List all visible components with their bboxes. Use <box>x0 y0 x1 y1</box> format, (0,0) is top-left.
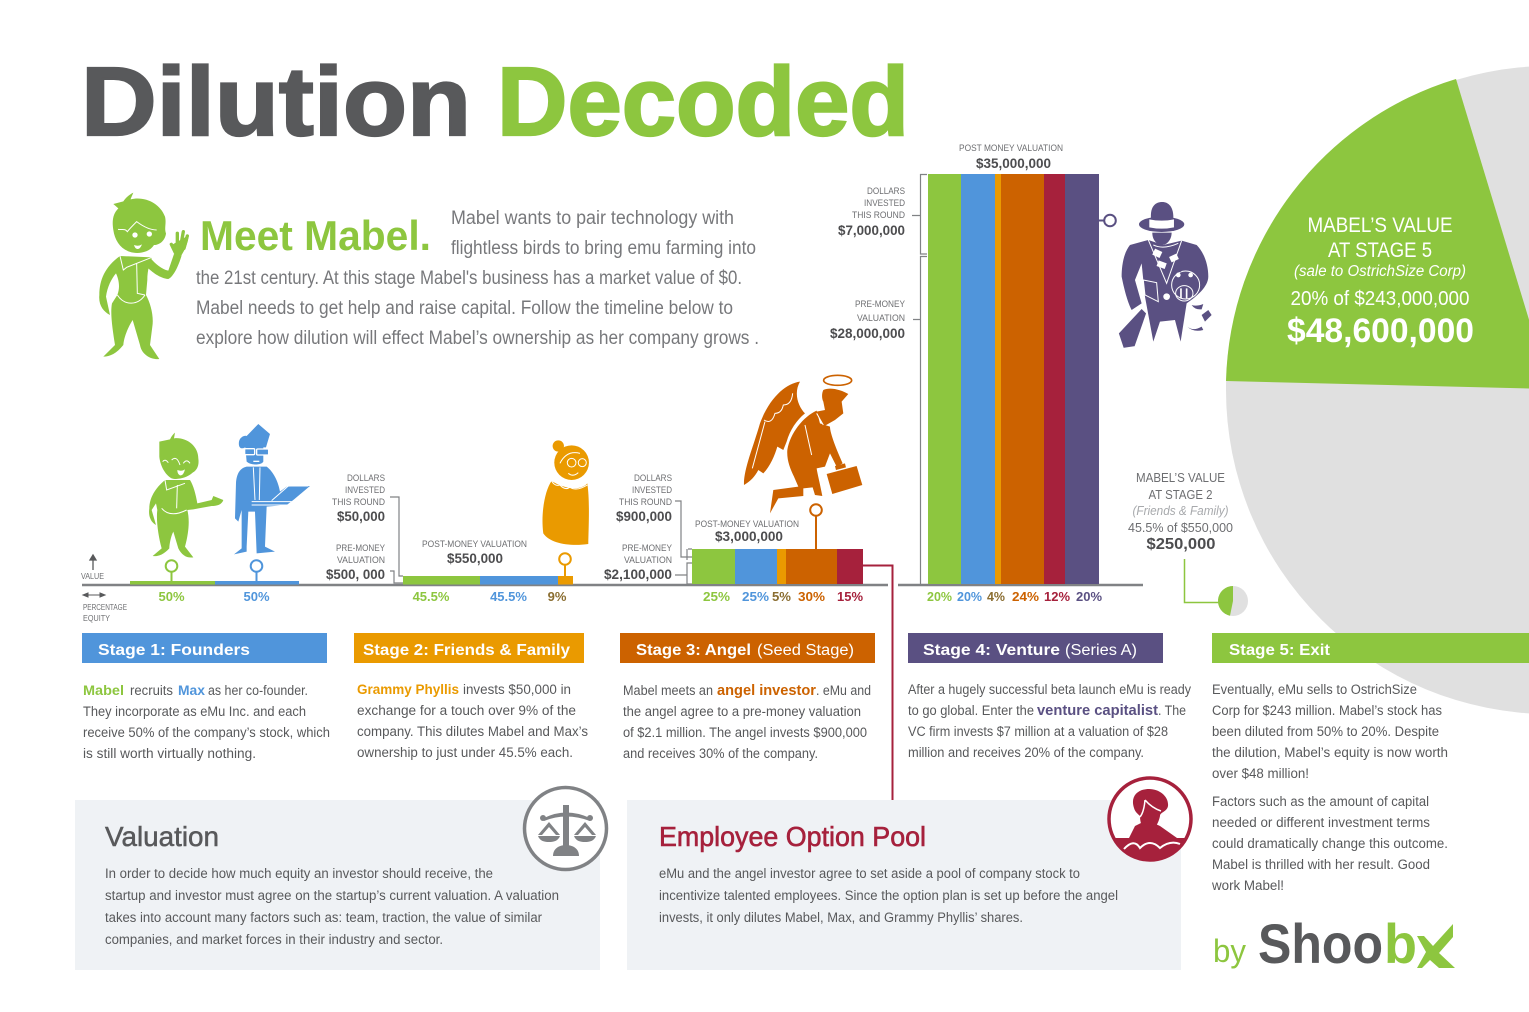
stage 3 labels: $2,100,000 <box>604 567 672 582</box>
stage 1 panel <box>82 633 330 761</box>
stage 3 percentages <box>703 589 863 604</box>
stage 3 percentages: 25% <box>742 589 769 604</box>
callout: Mabel's value at stage 2 <box>1128 470 1233 553</box>
panel: valuation: companies, and market forces in their industry and sector. <box>105 932 443 947</box>
intro text: flightless birds to bring emu farming into <box>451 238 756 259</box>
callout: Mabel's value at stage 5: $48,600,000 <box>1287 312 1474 350</box>
stage 4 post-money label: $35,000,000 <box>976 156 1051 171</box>
stage 2 panel <box>354 633 588 760</box>
title: Decoded <box>497 47 909 156</box>
stage 3 percentages: 30% <box>798 589 825 604</box>
icon: employee <box>1109 778 1191 860</box>
stage 4 labels: VALUATION <box>857 313 905 324</box>
option pool connector <box>863 566 892 800</box>
stage 4 labels: THIS ROUND <box>852 210 905 221</box>
stage 3 post-money label: $3,000,000 <box>715 529 783 544</box>
stage 4 post-money label <box>959 143 1063 171</box>
title: Dilution <box>81 47 471 156</box>
callout: Mabel's value at stage 5 <box>1287 214 1474 350</box>
stage 2 panel: exchange for a touch over 9% of the <box>357 703 576 718</box>
stage 2 percentages: 9% <box>548 589 567 604</box>
stage 2 labels: $500, 000 <box>326 567 385 582</box>
stage 2 post-money label: $550,000 <box>447 551 503 566</box>
stage 4 labels: PRE-MONEY <box>855 299 906 310</box>
stage 4 panel: Stage 4: Venture <box>923 642 1060 659</box>
stage 3 panel: angel investor <box>717 682 816 699</box>
stage 1 panel: Stage 1: Founders <box>98 642 250 659</box>
logo: by Shoobx: Shoo <box>1258 912 1383 975</box>
stage 4 panel: venture capitalist <box>1037 703 1158 719</box>
stage 1 panel: receive 50% of the company’s stock, which <box>83 725 330 740</box>
stage 2 panel: Stage 2: Friends & Family <box>363 642 570 659</box>
stage 4 bar <box>928 174 1116 584</box>
stage 3 labels: PRE-MONEY <box>622 543 673 554</box>
panel: employee option pool: incentivize talented employees. Since the option plan is set up before the angel <box>659 888 1118 903</box>
stage 4 panel: (Series A) <box>1065 642 1137 659</box>
stage 2 brackets <box>390 497 403 583</box>
panel: employee option pool <box>627 800 1181 970</box>
stage 4 labels: INVESTED <box>864 198 905 209</box>
stage 3 brackets <box>675 501 692 584</box>
stage 2 labels: VALUATION <box>337 555 385 566</box>
stage 4 panel: VC firm invests $7 million at a valuation of $28 <box>908 724 1168 739</box>
logo: by Shoobx: b <box>1384 912 1417 975</box>
stage 3 panel: Mabel meets an <box>623 683 713 698</box>
stage 4 panel: to go global. Enter the <box>908 703 1034 718</box>
stage 1 bar <box>130 560 299 584</box>
panel: employee option pool: Employee Option Pool <box>659 821 926 852</box>
stage 3 labels: $900,000 <box>616 509 672 524</box>
stage 2 percentages: 45.5% <box>413 589 450 604</box>
panel: valuation: startup and investor must agree on the startup’s current valuation. A valuation <box>105 888 559 903</box>
icon: Grammy Phyllis <box>542 440 589 545</box>
stage 1 percentages: 50% <box>158 589 185 604</box>
stage 3 percentages: 15% <box>837 589 863 604</box>
stage 4 percentages: 4% <box>987 589 1005 604</box>
stage 1 panel: is still worth virtually nothing. <box>83 746 256 761</box>
stage 2 labels <box>326 473 386 582</box>
stage 3 labels: DOLLARS <box>634 473 672 484</box>
stage 5 panel: Stage 5: Exit <box>1229 642 1330 659</box>
stage 4 panel: million and receives 20% of the company. <box>908 745 1144 760</box>
stage 1 percentages: 50% <box>243 589 270 604</box>
stage 3 panel: and receives 30% of the company. <box>623 746 818 761</box>
stage 5 panel: needed or different investment terms <box>1212 815 1430 830</box>
panel: valuation: Valuation <box>105 821 219 852</box>
legend: value and percentage equity: VALUE <box>81 571 104 581</box>
stage 4 percentages: 12% <box>1044 589 1070 604</box>
intro text: Mabel wants to pair technology with <box>451 208 734 229</box>
stage 4 percentages: 20% <box>927 589 952 604</box>
callout: Mabel's value at stage 5: 20% of $243,000,000 <box>1290 288 1470 310</box>
stage 5 panel: work Mabel! <box>1211 878 1284 893</box>
callout: Mabel's value at stage 5: AT STAGE 5 <box>1328 239 1432 262</box>
stage 3 panel: . eMu and <box>816 683 871 698</box>
stage 1 panel: They incorporate as eMu Inc. and each <box>83 704 306 719</box>
stage 5 panel: Corp for $243 million. Mabel’s stock has <box>1212 703 1442 718</box>
stage 2 percentages: 45.5% <box>490 589 527 604</box>
stage 5 panel: could dramatically change this outcome. <box>1212 836 1448 851</box>
stage 2 post-money label <box>422 539 527 566</box>
stage 4 labels: $7,000,000 <box>838 223 905 238</box>
legend: value and percentage equity: EQUITY <box>83 613 110 623</box>
icon: scales <box>524 788 606 870</box>
stage 4 labels <box>830 186 906 341</box>
intro text <box>196 208 759 349</box>
stage 4 percentages: 24% <box>1012 589 1039 604</box>
legend: value and percentage equity: PERCENTAGE <box>83 602 127 612</box>
stage 3 labels: INVESTED <box>632 485 672 496</box>
panel: valuation: In order to decide how much equity an investor should receive, the <box>105 866 493 881</box>
stage 1 panel: Mabel <box>83 683 124 698</box>
stage 3 percentages: 5% <box>772 589 791 604</box>
stage 3 panel <box>620 633 875 761</box>
stage 5 panel: over $48 million! <box>1212 766 1309 781</box>
stage 5 panel: the dilution, Mabel’s equity is now worth <box>1212 745 1448 760</box>
logo: by Shoobx: by <box>1213 933 1246 969</box>
panel: valuation: takes into account many factors such as: team, traction, the value of similar <box>105 910 542 925</box>
stage 2 labels: PRE-MONEY <box>336 543 386 554</box>
stage 3 panel: (Seed Stage) <box>757 642 854 659</box>
stage 1 percentages <box>158 589 270 604</box>
stage 1 panel: as her co-founder. <box>208 683 308 698</box>
stage 4 panel: After a hugely successful beta launch eMu is ready <box>908 682 1191 697</box>
stage 2 panel: ownership to just under 45.5% each. <box>357 745 573 760</box>
intro text: Mabel needs to get help and raise capital. Follow the timeline below to <box>196 298 733 319</box>
stage 4 post-money label: POST MONEY VALUATION <box>959 143 1063 154</box>
stage 2 labels: THIS ROUND <box>332 497 385 508</box>
stage 2 panel: Grammy Phyllis <box>357 682 459 697</box>
stage 5 panel: Eventually, eMu sells to OstrichSize <box>1212 682 1417 697</box>
stage 3 bar <box>692 504 863 584</box>
stage 2 labels: $50,000 <box>337 509 385 524</box>
icon: Mabel presenting <box>149 433 223 557</box>
logo: by Shoobx <box>1213 912 1455 975</box>
timeline axis <box>82 584 1143 586</box>
stage 2 panel: invests $50,000 in <box>463 682 571 697</box>
icon: Mabel waving <box>99 193 187 359</box>
stage 3 panel: of $2.1 million. The angel invests $900,000 <box>623 725 867 740</box>
stage 5 panel: Factors such as the amount of capital <box>1212 794 1429 809</box>
stage 2 labels: INVESTED <box>345 485 385 496</box>
stage 2 post-money label: POST-MONEY VALUATION <box>422 539 527 550</box>
stage 3 percentages: 25% <box>703 589 730 604</box>
callout: Mabel's value at stage 2: 45.5% of $550,000 <box>1128 520 1233 535</box>
callout: Mabel's value at stage 5: (sale to OstrichSize Corp) <box>1294 263 1466 280</box>
stage 5 panel <box>1211 633 1529 893</box>
callout: Mabel's value at stage 2: AT STAGE 2 <box>1148 487 1212 502</box>
stage 3 panel: Stage 3: Angel <box>636 642 751 659</box>
stage 4 brackets <box>912 174 927 585</box>
intro text: explore how dilution will effect Mabel’s ownership as her company grows . <box>196 328 759 349</box>
panel: valuation <box>75 800 600 970</box>
stage 3 post-money label <box>695 519 799 544</box>
icon: angel investor <box>744 375 862 513</box>
stage 3 labels: VALUATION <box>624 555 672 566</box>
stage 4 percentages: 20% <box>1076 589 1102 604</box>
stage 4 panel <box>908 633 1191 760</box>
stage 3 post-money label: POST-MONEY VALUATION <box>695 519 799 530</box>
stage 4 labels: $28,000,000 <box>830 326 905 341</box>
stage 4 percentages: 20% <box>957 589 982 604</box>
stage 5 panel: Mabel is thrilled with her result. Good <box>1212 857 1430 872</box>
icon: Max with laptop <box>234 424 310 554</box>
big pie chart: Mabel's value at stage 5 <box>1226 66 1529 714</box>
panel: employee option pool: invests, it only dilutes Mabel, Max, and Grammy Phyllis’ shares. <box>659 910 1023 925</box>
callout: Mabel's value at stage 2: MABEL’S VALUE <box>1136 470 1225 485</box>
stage 3 labels: THIS ROUND <box>619 497 672 508</box>
stage 5 panel: been diluted from 50% to 20%. Despite <box>1212 724 1439 739</box>
panel: employee option pool: eMu and the angel investor agree to set aside a pool of company stock to <box>659 866 1080 881</box>
stage 2 panel: company. This dilutes Mabel and Max’s <box>357 724 588 739</box>
stage 2 percentages <box>413 589 567 604</box>
title <box>81 47 909 156</box>
callout: Mabel's value at stage 2: (Friends & Family) <box>1132 503 1228 518</box>
intro text: the 21st century. At this stage Mabel's business has a market value of $0. <box>196 268 742 289</box>
stage 1 panel: recruits <box>130 683 173 698</box>
stage 4 panel: . The <box>1158 703 1186 718</box>
stage 4 labels: DOLLARS <box>867 186 905 197</box>
callout: Mabel's value at stage 5: MABEL’S VALUE <box>1308 214 1452 237</box>
legend: value and percentage equity <box>81 555 127 623</box>
small pie chart with connector <box>1184 559 1248 616</box>
stage 2 labels: DOLLARS <box>347 473 385 484</box>
callout: Mabel's value at stage 2: $250,000 <box>1146 536 1216 553</box>
heading: Meet Mabel: Meet Mabel. <box>200 212 431 259</box>
stage 4 percentages <box>927 589 1102 604</box>
icon: venture capitalist <box>1118 202 1212 348</box>
stage 2 bar <box>403 553 573 584</box>
stage 1 panel: Max <box>178 683 206 698</box>
stage 3 panel: the angel agree to a pre-money valuation <box>623 704 861 719</box>
stage 3 labels <box>604 473 673 582</box>
